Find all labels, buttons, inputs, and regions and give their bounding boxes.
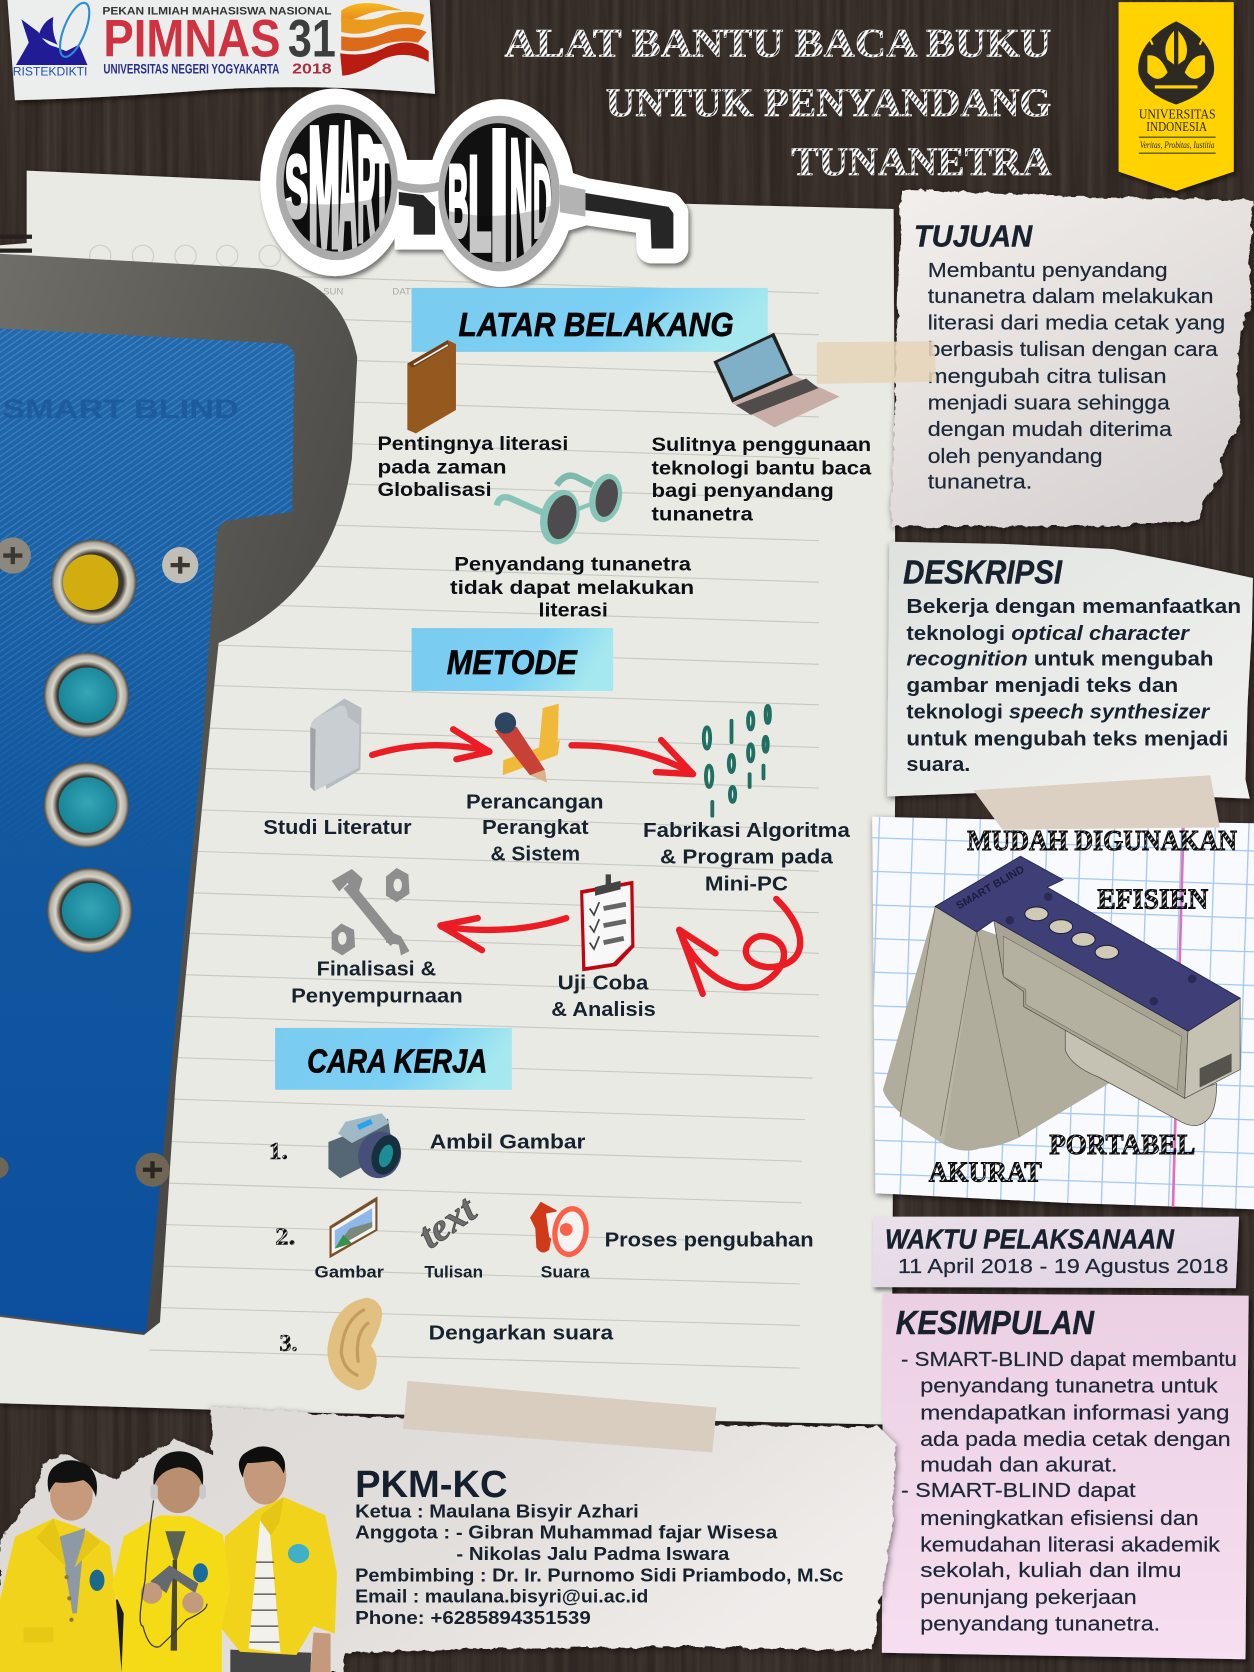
heading: waktu pelaksanaan: WAKTU PELAKSANAAN (885, 1224, 1175, 1255)
arrow: uji coba to finalisasi (440, 918, 566, 950)
gap behind members (115, 1599, 130, 1672)
text: sulitnya penggunaan: tunanetra (652, 503, 754, 525)
icon: clipboard (580, 874, 634, 971)
text: deskripsi body: Bekerja dengan memanfaatkan (906, 596, 1241, 618)
text: sulitnya penggunaan (652, 434, 872, 525)
title: UNTUK PENYANDANG (606, 80, 1051, 125)
person 3 (220, 1446, 337, 1672)
heading: latar belakang: LATAR BELAKANG (459, 307, 734, 344)
icon: 3D text: text (411, 1188, 485, 1257)
text: team details: Email : maulana.bisyri@ui.ac.id (355, 1586, 648, 1607)
text: tujuan body: Membantu penyandang (928, 260, 1168, 282)
tape: bottom (403, 1381, 717, 1452)
text: team details: - Nikolas Jalu Padma Iswara (456, 1543, 730, 1564)
section: metode (263, 628, 851, 1021)
heading: metode: METODE (447, 644, 578, 682)
notebook paper: DATE (392, 286, 417, 297)
text: deskripsi body: teknologi optical character (906, 623, 1190, 645)
text: kesimpulan body: penyandang tunanetra. (920, 1613, 1160, 1635)
text: kesimpulan body: penunjang pekerjaan (920, 1587, 1137, 1609)
logo: Universitas Indonesia banner (1119, 2, 1234, 191)
label: uji coba: Uji Coba (558, 973, 649, 995)
text: pentingnya literasi (377, 433, 568, 501)
device grey body (0, 254, 357, 1335)
text: tujuan body: menjadi suara sehingga (928, 392, 1171, 414)
panel: tujuan (891, 190, 1253, 527)
tape: grid (974, 775, 1220, 830)
text: deskripsi body: recognition untuk mengubah (906, 648, 1213, 670)
text: tujuan body: tunanetra. (928, 471, 1032, 493)
icon: document (310, 698, 361, 791)
label: fabrikasi algoritma: Mini-PC (705, 873, 788, 895)
label: finalisasi: Finalisasi & (317, 959, 436, 981)
lens: blind: I (489, 94, 509, 298)
heading: kesimpulan: KESIMPULAN (896, 1305, 1095, 1342)
text: deskripsi body: untuk mengubah teks menjadi (906, 728, 1228, 750)
notebook paper (0, 171, 896, 1425)
arrow: literatur to perancangan (372, 729, 489, 759)
label: fabrikasi algoritma (643, 820, 851, 895)
heading: deskripsi: DESKRIPSI (903, 554, 1063, 591)
text: tujuan body: dengan mudah diterima (928, 419, 1173, 441)
logo: Ristekdikti emblem (13, 0, 95, 79)
step number 1: 1. (269, 1138, 288, 1165)
label: uji coba (551, 973, 656, 1021)
logo: PIMNAS 31 (7, 0, 435, 100)
lens: blind: L (468, 129, 492, 278)
logo: PIMNAS 31: 2018 (292, 61, 332, 78)
text: deskripsi body: gambar menjadi teks dan (906, 675, 1178, 697)
text: pentingnya literasi: Globalisasi (377, 479, 492, 501)
panel: waktu pelaksanaan (872, 1217, 1239, 1288)
text: tujuan body: oleh penyandang (928, 446, 1103, 468)
icon: book (407, 340, 456, 433)
label: perancangan perangkat (466, 791, 604, 866)
3D model of device: SMART BLIND (954, 863, 1027, 912)
emblem (1138, 21, 1214, 104)
text: tujuan body (928, 260, 1225, 493)
label: proses pengubahan: Proses pengubahan (605, 1230, 814, 1252)
text: deskripsi body (906, 596, 1241, 776)
label: suara: Suara (541, 1262, 591, 1281)
text: kesimpulan body: ada pada media cetak dengan (920, 1429, 1231, 1451)
lens: smart: M (308, 92, 340, 281)
heading: tujuan: TUJUAN (914, 218, 1033, 253)
panel: deskripsi (887, 542, 1253, 799)
icon: picture (329, 1196, 377, 1258)
lens: blind: B (448, 144, 469, 259)
text: kesimpulan body: - SMART-BLIND dapat membantu (901, 1349, 1237, 1371)
icon: camera (328, 1113, 407, 1184)
text: team details: Phone: +6285894351539 (355, 1607, 591, 1628)
lens: blind: D (533, 143, 552, 259)
label: perancangan perangkat: Perangkat (482, 817, 589, 839)
title (504, 21, 1051, 184)
icon: wrench and nuts (332, 868, 409, 955)
label: gambar: Gambar (315, 1262, 385, 1281)
label: fabrikasi algoritma: Fabrikasi Algoritma (643, 820, 851, 842)
heading: latar belakang (412, 288, 768, 352)
buttons (44, 540, 136, 953)
panel: product grid paper (872, 775, 1254, 1209)
text: tujuan body: mengubah citra tulisan (928, 366, 1167, 388)
device blue front (0, 328, 294, 1333)
heading: cara kerja: CARA KERJA (307, 1044, 487, 1081)
text: kesimpulan body (901, 1349, 1237, 1635)
label: perancangan perangkat: & Sistem (491, 844, 580, 866)
text: sulitnya penggunaan: Sulitnya penggunaan (652, 434, 871, 456)
step number 3: 3. (279, 1330, 298, 1357)
label: tulisan: Tulisan (424, 1262, 483, 1281)
label: fabrikasi algoritma: & Program pada (660, 847, 834, 869)
text: kesimpulan body: mudah dan akurat. (920, 1455, 1118, 1477)
photo: team members (0, 1446, 337, 1672)
icon: megaphone (530, 1202, 592, 1259)
logo: PIMNAS 31: UNIVERSITAS NEGERI YOGYAKARTA (103, 61, 279, 77)
logo: PIMNAS 31: 31 (288, 10, 336, 69)
label: uji coba: & Analisis (551, 999, 656, 1021)
logo: Universitas Indonesia banner: Veritas, Probitas, Iustitia (1140, 140, 1215, 151)
logo: Universitas Indonesia banner: UNIVERSITAS (1139, 106, 1216, 121)
text: sulitnya penggunaan: bagi penyandang (652, 480, 834, 502)
text: kesimpulan body: - SMART-BLIND dapat (901, 1480, 1136, 1502)
label: studi literatur: Studi Literatur (263, 817, 412, 839)
text: tujuan body: berbasis tulisan dengan cara (928, 339, 1219, 361)
text: penyandang tunanetra: literasi (538, 599, 608, 621)
glasses sticker: Smart Blind (260, 86, 673, 298)
step number 2: 2. (275, 1223, 295, 1250)
text: tujuan body: tunanetra dalam melakukan (928, 286, 1213, 308)
lens: blind: N (510, 106, 533, 293)
icon: pencil and ruler (495, 704, 560, 783)
icon: glasses (497, 471, 626, 549)
text: penyandang tunanetra: tidak dapat melakukan (450, 577, 694, 599)
text: kesimpulan body: meningkatkan efisiensi dan (920, 1508, 1199, 1530)
text: tujuan body: literasi dari media cetak yang (928, 312, 1225, 334)
text: pentingnya literasi: pada zaman (377, 456, 507, 478)
text: deskripsi body: teknologi speech synthesizer (906, 702, 1210, 724)
tape: top right (817, 341, 936, 384)
device photo (0, 254, 357, 1335)
lens: smart: T (373, 120, 391, 256)
text: sulitnya penggunaan: teknologi bantu baca (652, 458, 872, 480)
arrow: curly fabrikasi to uji coba (679, 899, 800, 994)
text: team details: Anggota : - Gibran Muhammad fajar Wisesa (355, 1522, 778, 1543)
text: team details: Ketua : Maulana Bisyir Azhari (355, 1500, 639, 1521)
logo: flames (340, 3, 429, 76)
notebook paper: SUN (323, 286, 343, 297)
label: portabel: PORTABEL (1049, 1129, 1195, 1161)
heading: PKM-KC: PKM-KC (355, 1463, 508, 1506)
logo: PIMNAS 31: PIMNAS (103, 10, 280, 69)
lens: blind (438, 116, 560, 272)
label: akurat: AKURAT (929, 1156, 1042, 1188)
text: deskripsi body: suara. (906, 754, 970, 776)
section: cara kerja (269, 1028, 814, 1390)
text: team details: Pembimbing : Dr. Ir. Purnomo Sidi Priambodo, M.Sc (355, 1564, 843, 1585)
icon: ear (327, 1298, 382, 1390)
section: latar belakang (377, 288, 872, 621)
text: kesimpulan body: sekolah, kuliah dan ilmu (920, 1560, 1181, 1582)
text: pentingnya literasi: Pentingnya literasi (377, 433, 568, 455)
logo: Ristekdikti emblem: RISTEKDIKTI (13, 66, 87, 79)
icon: laptop (713, 333, 840, 427)
person 2 (112, 1451, 230, 1672)
label: perancangan perangkat: Perancangan (466, 791, 604, 813)
device blue front: SMART BLIND (2, 394, 239, 424)
label: finalisasi: Penyempurnaan (291, 985, 463, 1007)
text: kesimpulan body: penyandang tunanetra untuk (920, 1376, 1219, 1398)
logo: Universitas Indonesia banner: INDONESIA (1146, 119, 1207, 134)
lens: smart (276, 104, 398, 260)
text: team details (355, 1500, 843, 1628)
panel: team info (0, 1381, 896, 1672)
text: penyandang tunanetra (450, 553, 694, 621)
text: tanggal: 11 April 2018 - 19 Agustus 2018 (898, 1256, 1228, 1278)
title: TUNANETRA (791, 139, 1051, 184)
heading: cara kerja (275, 1028, 512, 1090)
person 1 (0, 1460, 122, 1672)
label: efisien: EFISIEN (1097, 884, 1208, 916)
lens: smart: S (285, 139, 308, 236)
3D model of device (883, 856, 1240, 1151)
panel: kesimpulan (882, 1293, 1249, 1659)
label: dengarkan suara: Dengarkan suara (429, 1322, 614, 1344)
logo: PIMNAS 31: PEKAN ILMIAH MAHASISWA NASIONAL (102, 5, 332, 17)
text: kesimpulan body: kemudahan literasi akademik (920, 1535, 1221, 1557)
screws (0, 537, 198, 1187)
text: kesimpulan body: mendapatkan informasi yang (920, 1402, 1229, 1424)
title: ALAT BANTU BACA BUKU (504, 21, 1051, 66)
arrow: perancangan to fabrikasi (572, 740, 693, 774)
label: finalisasi (291, 959, 463, 1007)
lens: smart: A (338, 86, 357, 288)
lens: smart: R (357, 106, 376, 272)
heading: metode (412, 628, 613, 691)
label: ambil gambar: Ambil Gambar (430, 1131, 586, 1153)
icon: binary digits (704, 706, 770, 816)
text: penyandang tunanetra: Penyandang tunanetra (454, 553, 692, 575)
